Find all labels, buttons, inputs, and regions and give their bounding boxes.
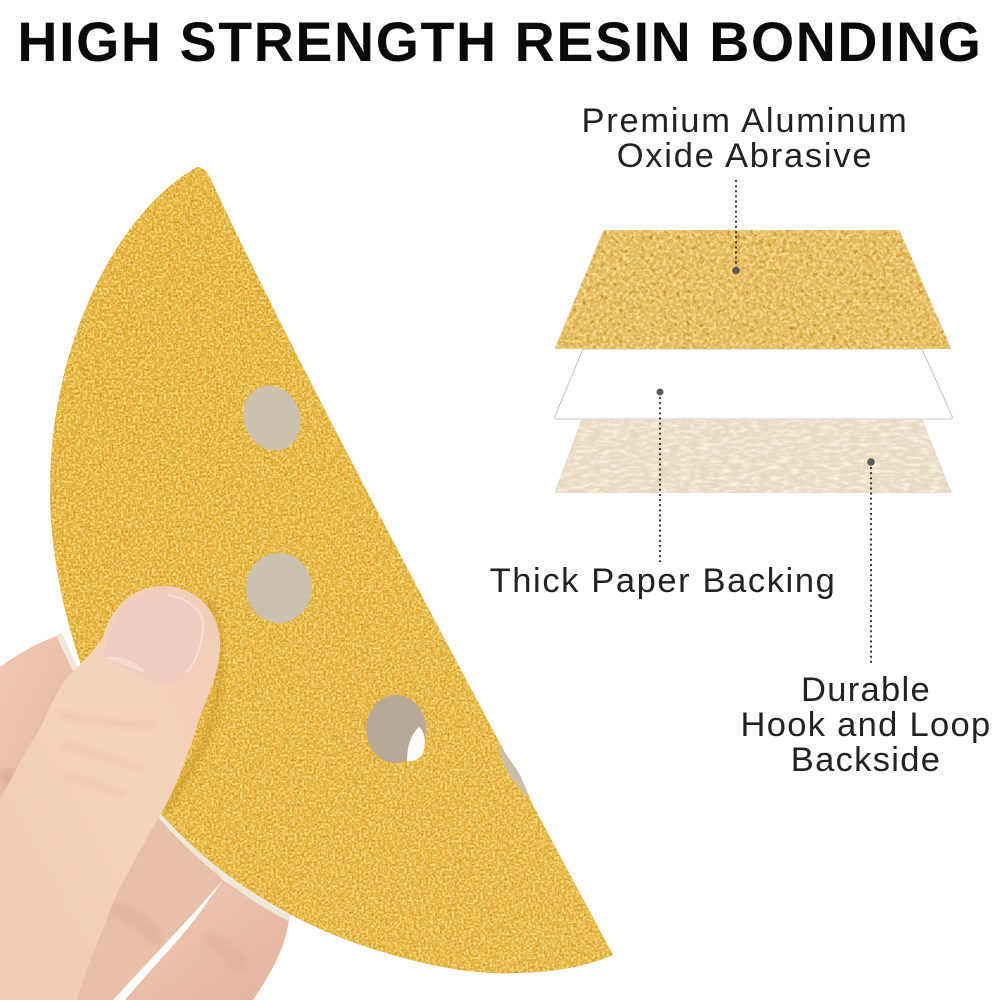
hand: back fingers [0,636,289,1000]
layer: hook and loop [555,420,951,493]
callout: durable hook and loop backside: Hook and Loop [741,706,991,744]
hole 4 [497,742,530,798]
callout: durable hook and loop backside: Durable [801,671,931,709]
hole 3 [366,695,426,763]
layer: abrasive [555,230,951,349]
callout: thick paper backing [490,388,836,600]
callout: premium aluminum oxide abrasive: Premium Aluminum [581,102,909,140]
callout: durable hook and loop backside: Backside [791,741,941,779]
callout: premium aluminum oxide abrasive: Oxide Abrasive [617,137,873,175]
hole 1 [234,377,310,459]
thumbnail [103,592,204,685]
layer: paper backing [555,349,952,419]
sanding disc half circle [50,167,613,973]
callout: premium aluminum oxide abrasive [581,102,909,274]
hand: thumb [0,586,220,1000]
title: HIGH STRENGTH RESIN BONDING [17,11,983,73]
sanding disc back edge [59,634,289,918]
thumb shadow on disc [165,600,221,812]
callout: durable hook and loop backside [741,458,991,779]
hole 2 [246,553,312,623]
callout: thick paper backing: Thick Paper Backing [490,562,836,600]
thumb knuckle creases [60,715,155,795]
